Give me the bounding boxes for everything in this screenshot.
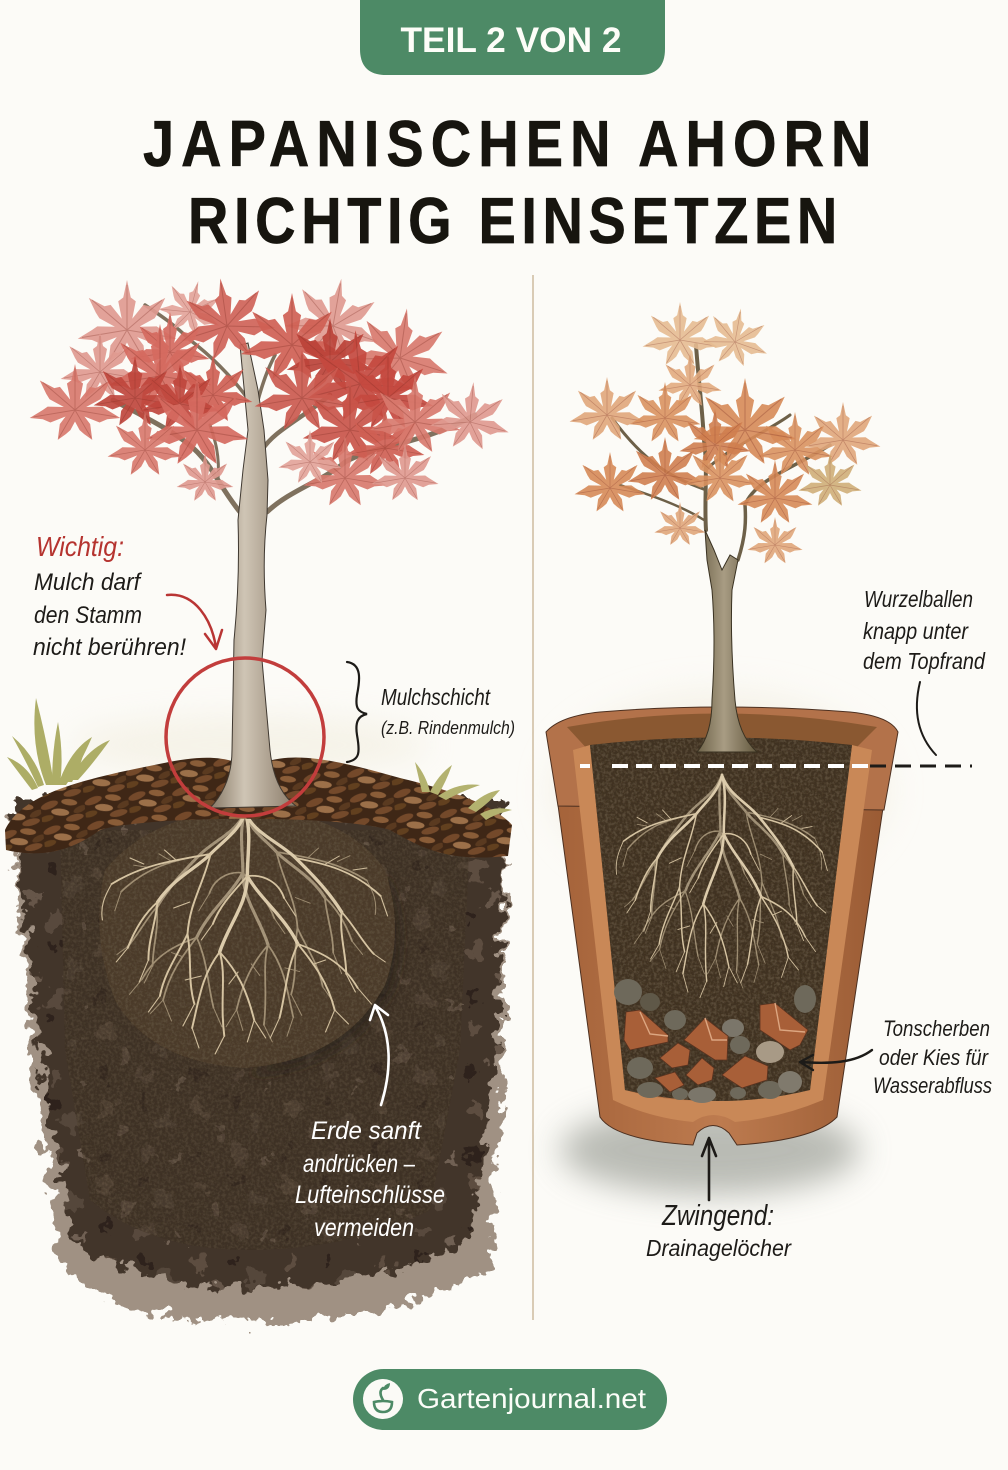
arrow: red curved	[167, 595, 222, 649]
arrow: to drainage layer	[800, 1050, 872, 1070]
ground wash	[70, 715, 430, 775]
panel: planting in the ground	[5, 271, 515, 1322]
label: shards or gravel: oder Kies für	[879, 1045, 989, 1070]
label: press soil gently: Lufteinschlüsse	[295, 1181, 445, 1209]
title: JAPANISCHEN AHORN	[143, 107, 871, 180]
tree: trunk and branches	[113, 305, 475, 808]
label: drainage holes	[646, 1200, 792, 1261]
tree: orange canopy branches	[612, 345, 830, 560]
arrow: white to root ball	[370, 1005, 389, 1105]
label: mulch layer	[381, 684, 515, 738]
mulch layer	[5, 757, 512, 858]
arrow: to drainage hole	[702, 1138, 716, 1200]
footer brand pill	[353, 1369, 667, 1430]
dashed fill line	[580, 764, 972, 768]
callout: important note: nicht berühren!	[33, 634, 186, 661]
soil cross-section	[12, 800, 505, 1322]
ground wash and shadow	[550, 690, 890, 1195]
cut faces	[573, 745, 872, 1122]
label: root ball below rim	[863, 586, 986, 674]
roots in pot	[616, 775, 827, 998]
highlight circle: mulch must not touch trunk	[166, 658, 324, 816]
title: RICHTIG EINSETZEN	[188, 184, 837, 257]
label: press soil gently: andrücken –	[303, 1150, 416, 1178]
tree: orange canopy leaves	[570, 302, 880, 563]
header tab: part label: TEIL 2 VON 2	[400, 21, 622, 60]
label: shards or gravel	[873, 1016, 992, 1098]
callout: important note: Wichtig:	[36, 531, 124, 562]
label: shards or gravel: Tonscherben	[883, 1016, 990, 1041]
tree: pot trunk	[697, 530, 757, 752]
panel divider	[532, 275, 534, 1320]
root ball	[99, 808, 401, 1076]
label: root ball below rim: Wurzelballen	[864, 586, 973, 612]
callout: important note: Mulch darf	[34, 569, 142, 596]
title	[143, 107, 871, 257]
pot body	[558, 805, 883, 1145]
leader line to rim	[917, 682, 936, 755]
label: mulch layer: Mulchschicht	[381, 684, 491, 710]
callout: important note	[33, 531, 186, 661]
tree: red canopy	[30, 271, 513, 505]
label: press soil gently: vermeiden	[314, 1214, 414, 1242]
icon: sprout logo	[363, 1379, 403, 1419]
drainage layer: pot shards	[624, 1003, 808, 1092]
label: press soil gently	[295, 1117, 445, 1242]
label: drainage holes: Zwingend:	[661, 1200, 774, 1232]
bracket: mulch layer	[347, 662, 367, 762]
callout: important note: den Stamm	[34, 602, 142, 629]
grass tufts	[7, 698, 512, 820]
terracotta pot	[546, 707, 898, 1145]
label: press soil gently: Erde sanft	[311, 1117, 422, 1145]
header tab: part label	[360, 0, 665, 75]
label: mulch layer: (z.B. Rindenmulch)	[381, 718, 515, 738]
label: root ball below rim: dem Topfrand	[863, 648, 986, 674]
pot rim	[546, 707, 898, 810]
potting soil	[590, 738, 852, 1101]
panel: planting in a pot	[546, 302, 992, 1261]
label: root ball below rim: knapp unter	[863, 618, 969, 644]
footer brand pill: Gartenjournal.net	[417, 1383, 646, 1414]
drainage layer: stones	[614, 979, 816, 1103]
label: drainage holes: Drainagelöcher	[646, 1235, 792, 1261]
